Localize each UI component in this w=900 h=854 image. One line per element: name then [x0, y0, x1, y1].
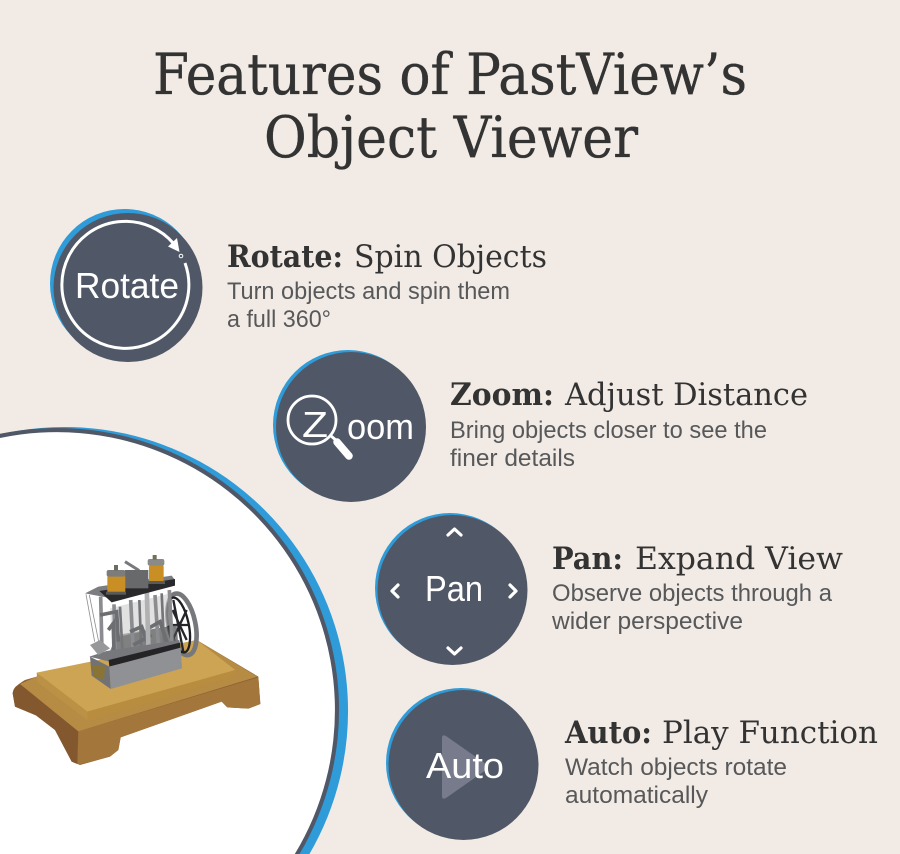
icon: rotate [50, 209, 202, 362]
heading: rotate [227, 239, 547, 275]
flywheel [162, 591, 202, 658]
heading: pan: Pan: [552, 541, 623, 577]
text: rotate description: a full 360° [227, 306, 331, 333]
text: zoom description: finer details [450, 445, 575, 472]
text: rotate description: Turn objects and spin them [227, 278, 510, 305]
illustration: wooden base [13, 640, 260, 765]
top plate [85, 576, 175, 598]
heading: rotate: Rotate: [227, 239, 343, 275]
heading: pan: Expand View [635, 541, 843, 577]
magnifier [288, 396, 349, 456]
icon: pan [375, 513, 528, 665]
title [153, 42, 747, 171]
heading: pan [552, 541, 843, 577]
direction chevrons [392, 529, 516, 654]
engine block [89, 640, 182, 689]
icon: zoom [273, 350, 426, 502]
text: auto description [565, 754, 787, 809]
heading: zoom: Zoom: [450, 377, 554, 413]
text: pan description: Observe objects through a [552, 580, 833, 607]
heading: rotate: Spin Objects [354, 239, 547, 275]
icon: zoom: oom [347, 406, 414, 447]
title: Object Viewer [264, 105, 638, 171]
heading: auto: Auto: [564, 715, 652, 751]
text: auto description: Watch objects rotate [565, 754, 787, 781]
icon: pan: Pan [425, 568, 483, 609]
icon: rotate: Rotate [75, 265, 179, 306]
icon: zoom: Z [302, 404, 328, 445]
icon: auto: Auto [426, 745, 504, 786]
text: zoom description [450, 417, 767, 472]
columns and rods [86, 562, 178, 660]
heading: zoom [450, 377, 808, 413]
play triangle [442, 735, 488, 799]
text: auto description: automatically [565, 782, 708, 809]
heading: auto: Play Function [662, 715, 878, 751]
circular arrow [62, 221, 189, 348]
heading: zoom: Adjust Distance [564, 377, 808, 413]
panel: object photo circle [0, 427, 348, 854]
text: rotate description [227, 278, 510, 333]
heading: auto [564, 715, 878, 751]
text: pan description [551, 580, 833, 635]
text: pan description: wider perspective [551, 608, 743, 635]
icon: auto [386, 688, 538, 840]
text: zoom description: Bring objects closer to see the [450, 417, 767, 444]
cylinders [106, 555, 165, 595]
title: Features of PastView’s [153, 42, 747, 108]
illustration: model steam engine [85, 555, 202, 689]
